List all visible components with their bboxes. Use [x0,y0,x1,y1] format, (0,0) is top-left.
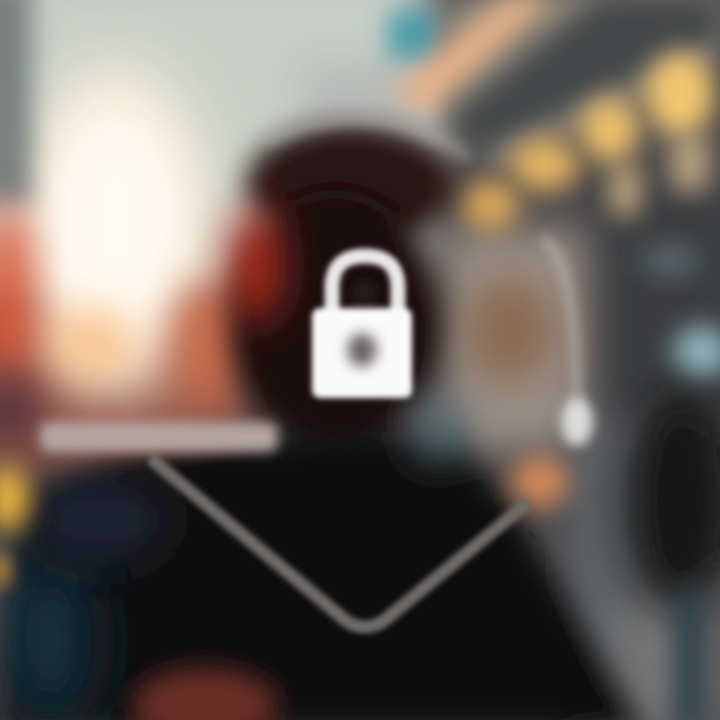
shield outline [155,118,577,627]
background: bright sky and sunset [0,0,450,470]
foreground person [0,123,640,720]
figure in the background [625,390,720,720]
bright node on shield [561,398,593,446]
horizontal light bar [40,422,278,452]
background: buildings and street lights [388,0,720,720]
icon: padlock [312,256,412,398]
